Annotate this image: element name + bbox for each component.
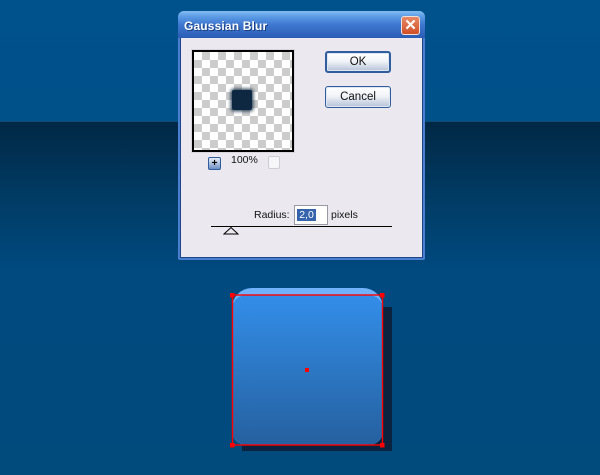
square shadow (242, 307, 392, 451)
radius input: 2,0 (299, 209, 314, 221)
pixels label: pixels (331, 209, 358, 221)
slider handle (223, 227, 239, 234)
radius input (294, 205, 328, 225)
dialog: Gaussian Blur (178, 11, 425, 260)
close button: ✕ (404, 17, 417, 34)
close button (401, 16, 420, 35)
OK button (325, 51, 391, 73)
zoom plus button (208, 157, 221, 170)
zoom minus button (268, 156, 280, 169)
Cancel button (325, 86, 391, 108)
zoom percent: 100% (231, 154, 258, 166)
Cancel button: Cancel (340, 91, 376, 103)
blurred dark square (232, 90, 252, 110)
title bar (178, 11, 425, 38)
radius label: Radius: (254, 209, 290, 221)
preview pane (192, 50, 294, 152)
title text: Gaussian Blur (184, 19, 267, 33)
blue rounded square (232, 288, 383, 445)
slider track (211, 226, 392, 227)
zoom plus button: + (212, 158, 217, 169)
OK button: OK (350, 56, 366, 68)
